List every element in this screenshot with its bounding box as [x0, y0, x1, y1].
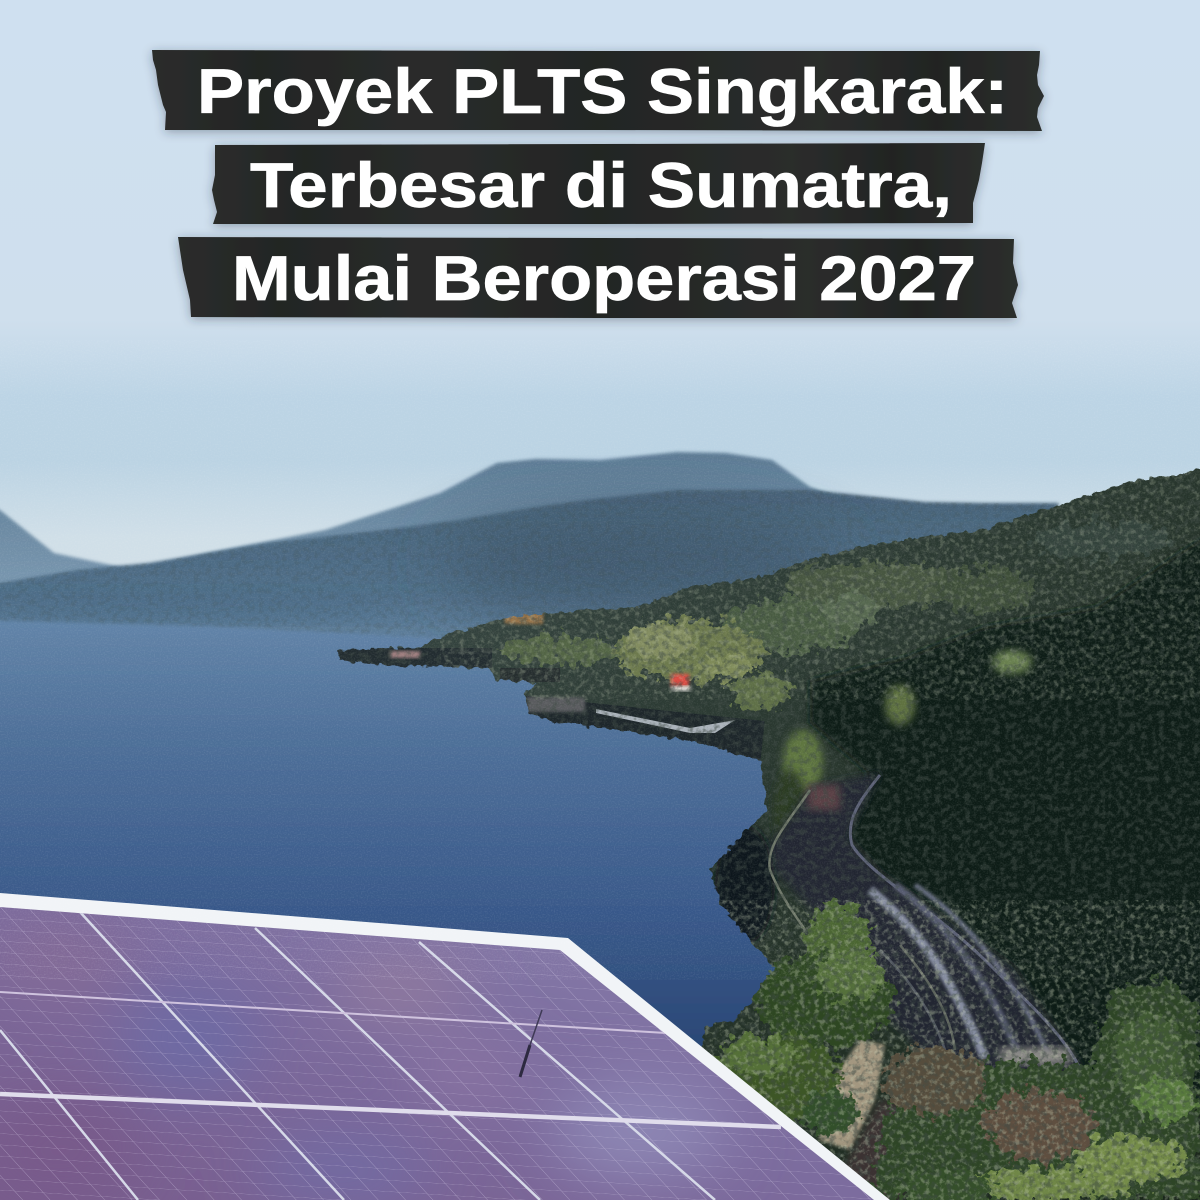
foliage texture: [330, 460, 1200, 1200]
tan footpath: [820, 1040, 885, 1150]
lakeside and foreground trees: [709, 903, 1200, 1200]
shoreline settlement: [337, 613, 765, 771]
distant mountains: [0, 452, 1060, 650]
title tape line 2: [212, 143, 985, 224]
film grain: [0, 340, 1200, 980]
title tape line 2: Terbesar di Sumatra,: [250, 151, 952, 221]
photovoltaic array: [0, 900, 880, 1200]
lit foliage patches: [500, 522, 1170, 712]
title tape line 1: Proyek PLTS Singkarak:: [197, 57, 1008, 127]
cell grid: [0, 900, 880, 1200]
dark forest slope: [810, 520, 1200, 1100]
title tape line 3: Mulai Beroperasi 2027: [232, 244, 976, 314]
green hillside: [330, 460, 1200, 1200]
solar panel roof: [0, 893, 890, 1200]
road corridor: [769, 773, 1082, 1085]
title tape line 3: [178, 237, 1018, 318]
mounting rails: [0, 912, 781, 1200]
small antenna: [530, 1010, 542, 1045]
lake: [0, 620, 900, 1150]
sky background: [0, 0, 1200, 640]
white roof edge: [0, 893, 890, 1200]
